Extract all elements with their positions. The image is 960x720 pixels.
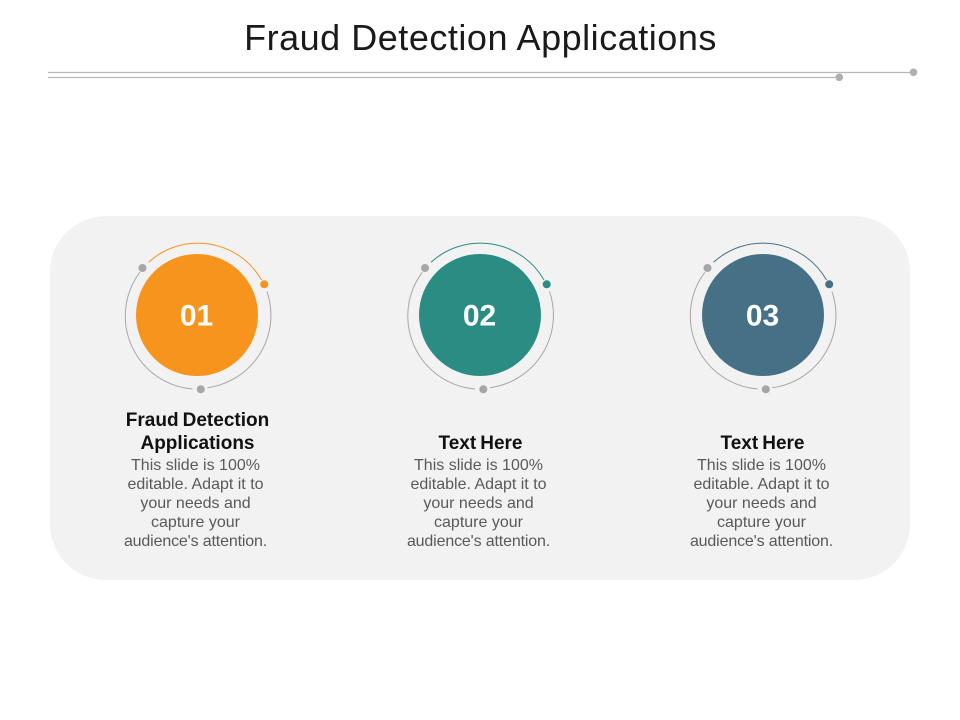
body text 03: capture your [717,514,807,531]
body text 02: This slide is 100% [414,457,543,474]
icon: ring with dots 02 [408,243,553,393]
panel: step 02 [407,243,553,550]
number circle 02: 02 [463,300,496,332]
icon: ring with dots 03 [690,243,836,393]
panel: background [50,216,910,580]
body text 01: This slide is 100% [131,457,260,474]
heading 01: Applications [140,433,255,454]
body text 03: This slide is 100% [697,457,826,474]
heading 03: Text Here [720,433,804,454]
title: Fraud Detection Applications [244,17,717,58]
body text 01: audience's attention. [124,533,267,550]
number circle 03: 03 [746,300,779,332]
panel: step 01 [124,243,271,550]
body text 03: editable. Adapt it to [693,476,830,493]
number circle 01: 01 [180,300,213,332]
body text 02: audience's attention. [407,533,550,550]
body text 01: your needs and [140,495,251,512]
panel: step 03 [690,243,836,550]
heading 02: Text Here [438,433,522,454]
number circle 01 [136,254,258,376]
body text 01: editable. Adapt it to [127,476,264,493]
body text 02: editable. Adapt it to [410,476,547,493]
number circle 02 [419,254,541,376]
body text 02: your needs and [423,495,534,512]
body text 01: capture your [151,514,241,531]
body text 02: capture your [434,514,524,531]
icon: ring with dots 01 [125,243,271,393]
body text 03: audience's attention. [690,533,833,550]
title rule lines with end dots [48,68,917,81]
body text 03: your needs and [706,495,817,512]
number circle 03 [702,254,824,376]
heading 01: Fraud Detection [126,410,269,431]
